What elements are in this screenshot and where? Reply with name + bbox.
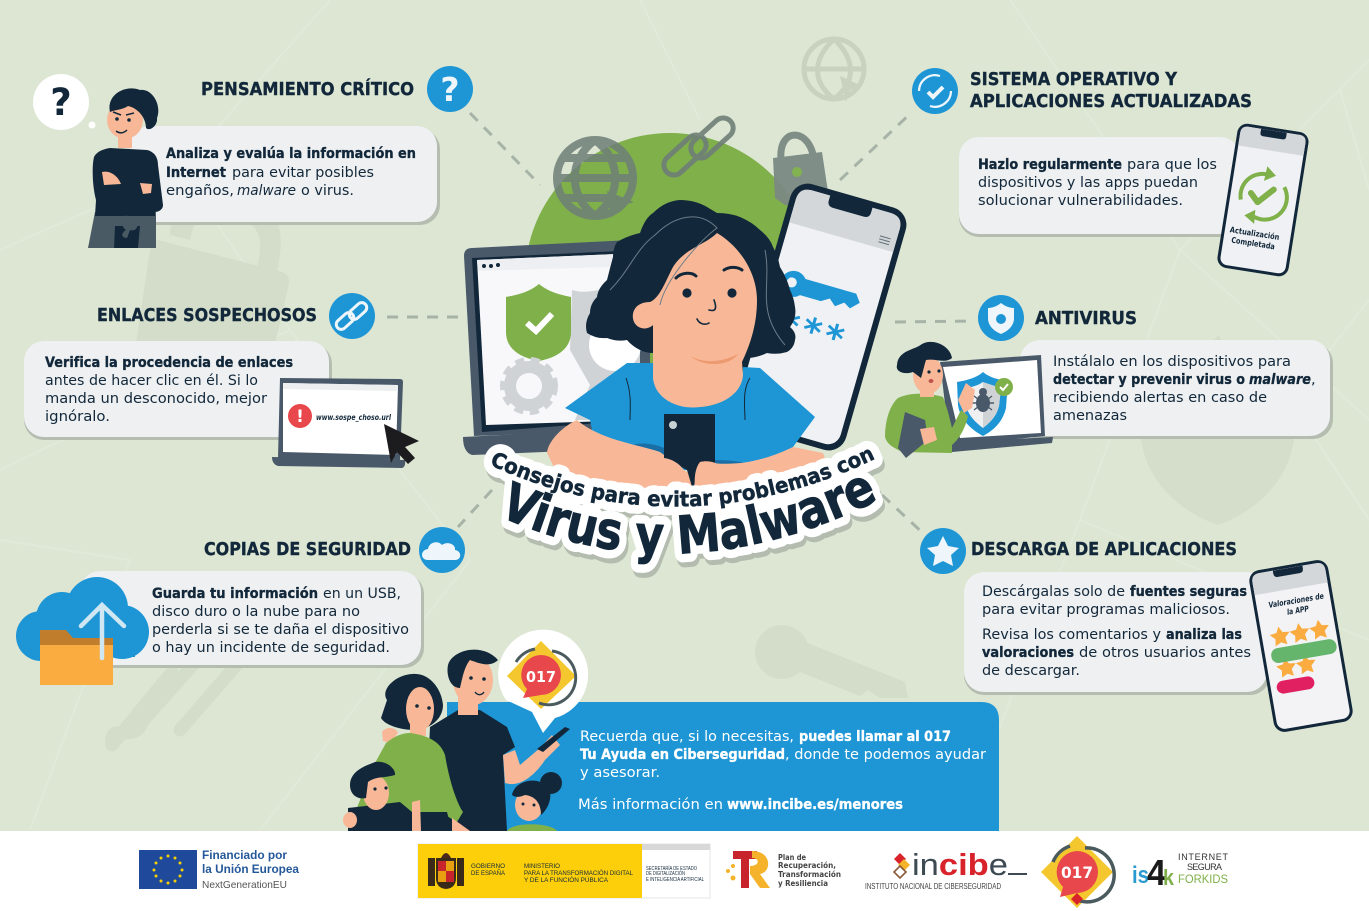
logo: IS4K: 4 bbox=[1147, 852, 1166, 893]
body text: solucionar vulnerabilidades. bbox=[978, 192, 1183, 209]
heading: COPIAS DE SEGURIDAD bbox=[204, 539, 411, 560]
body text: malware bbox=[237, 182, 296, 199]
logo text: Unión Europea: NextGenerationEU bbox=[202, 879, 287, 891]
body text: Recuerda que, si lo necesitas, bbox=[580, 728, 794, 745]
panel: copias de seguridad bbox=[16, 527, 465, 685]
body text: Más información en bbox=[578, 796, 723, 813]
phone: app ratings: Valoraciones de bbox=[1268, 591, 1325, 610]
body text: en un USB, bbox=[323, 585, 401, 602]
body text: analiza las bbox=[1166, 626, 1242, 643]
logo: IS4K: SEGURA bbox=[1187, 862, 1222, 872]
watermark: shield bbox=[1140, 335, 1295, 525]
body text: fuentes seguras bbox=[1130, 583, 1247, 600]
footer bbox=[0, 831, 1369, 911]
heading bbox=[970, 69, 1252, 112]
logo: 017: 017 bbox=[1061, 863, 1093, 882]
title text: Virus y Malware bbox=[508, 478, 876, 564]
logo: Plan de Recuperación: Transformación bbox=[778, 869, 841, 879]
blue panel bbox=[447, 702, 999, 831]
logo: IS4K: is bbox=[1132, 862, 1149, 889]
logo: Plan de Recuperación: Plan de bbox=[778, 852, 806, 862]
body text: de otros usuarios antes bbox=[1079, 644, 1251, 661]
body text: o virus. bbox=[301, 182, 354, 199]
logo: Plan de Recuperación: y Resiliencia bbox=[778, 878, 828, 888]
body text: , bbox=[1311, 371, 1316, 388]
logo: Gobierno de España: MINISTERIO bbox=[524, 863, 560, 870]
phone: app ratings bbox=[1248, 558, 1354, 734]
logo: IS4K: k bbox=[1163, 865, 1175, 890]
icon: question mark: ? bbox=[440, 70, 460, 109]
smartphone bbox=[726, 179, 911, 455]
icon: green shield with check bbox=[506, 284, 571, 361]
green circle bbox=[525, 133, 815, 423]
card bbox=[24, 341, 332, 440]
logo: 017 bbox=[1041, 836, 1114, 908]
logo: Plan de Recuperación bbox=[726, 851, 841, 888]
body text: Tu Ayuda en Ciberseguridad bbox=[580, 746, 785, 763]
icon: shield bbox=[978, 295, 1024, 341]
logo: Gobierno de España: SECRETARÍA DE ESTADO bbox=[646, 865, 697, 872]
title band: Consejos para evitar problemas con bbox=[484, 440, 883, 516]
body text: dispositivos y las apps puedan bbox=[978, 174, 1198, 191]
title text: Consejos para evitar problemas con bbox=[492, 450, 874, 509]
body text: para evitar posibles bbox=[232, 164, 374, 181]
held phone bbox=[664, 414, 715, 490]
laptop bbox=[463, 239, 650, 455]
icon: cloud bbox=[419, 527, 465, 573]
logo text: Unión Europea: Financiado por bbox=[202, 850, 288, 862]
boy with laptop bbox=[885, 342, 1053, 458]
logo: Gobierno de España: Y DE LA FUNCIÓN PÚBLICA bbox=[524, 877, 609, 884]
logo: IS4K bbox=[1132, 852, 1228, 893]
panel: llamar al 017 bbox=[343, 630, 999, 831]
body text bbox=[982, 583, 1251, 679]
body text: detectar y prevenir virus o bbox=[1053, 371, 1245, 388]
body text: Internet bbox=[166, 164, 226, 181]
watermark: paper clip bbox=[112, 640, 258, 745]
arms and hands bbox=[547, 420, 695, 500]
body text: recibiendo alertas en caso de bbox=[1053, 389, 1267, 406]
phone: update complete: Actualización bbox=[1229, 224, 1280, 242]
title band: Virus y Malware bbox=[501, 472, 883, 573]
watermark: padlock bbox=[132, 195, 289, 400]
body text: disco duro o la nube para no bbox=[152, 603, 360, 620]
icon: chain link bbox=[329, 293, 375, 339]
logo: Gobierno de España: PARA LA TRANSFORMACIÓN DIGITAL bbox=[524, 870, 634, 877]
body text bbox=[1053, 353, 1316, 424]
body text: , donde te podemos ayudar bbox=[785, 746, 986, 763]
body text: engaños, bbox=[166, 182, 234, 199]
heading: PENSAMIENTO CRÍTICO bbox=[201, 78, 414, 100]
body text: amenazas bbox=[1053, 407, 1127, 424]
heading: DESCARGA DE APLICACIONES bbox=[971, 539, 1237, 560]
logo text: Unión Europea bbox=[202, 850, 300, 891]
panel: antivirus bbox=[885, 295, 1333, 458]
heading: SISTEMA OPERATIVO Y bbox=[970, 69, 1178, 90]
body text: para que los bbox=[1127, 156, 1217, 173]
icon: star bbox=[920, 528, 966, 574]
body text bbox=[978, 156, 1217, 209]
speech bubble with 017 logo: 017 bbox=[526, 668, 556, 686]
man with arms crossed bbox=[88, 88, 163, 248]
logo: Plan de Recuperación: Recuperación, bbox=[778, 860, 836, 870]
phone: update complete: Completada bbox=[1231, 236, 1276, 251]
panel: sistema operativo bbox=[912, 68, 1310, 278]
body text: Revisa los comentarios y bbox=[982, 626, 1161, 643]
heading: APLICACIONES ACTUALIZADAS bbox=[970, 91, 1252, 112]
body text bbox=[166, 145, 416, 199]
card bbox=[1020, 340, 1333, 439]
body text: Analiza y evalúa la información en bbox=[166, 145, 416, 162]
logo: IS4K: INTERNET bbox=[1178, 852, 1228, 862]
body text: manda un desconocido, mejor bbox=[45, 390, 267, 407]
title band shadow: Virus y Malware bbox=[504, 490, 885, 578]
logo: INCIBE: INSTITUTO NACIONAL DE CIBERSEGURIDAD bbox=[865, 882, 1001, 891]
laptop with suspicious url: ! bbox=[296, 407, 304, 427]
body text: puedes llamar al 017 bbox=[799, 728, 951, 745]
heading: ENLACES SOSPECHOSOS bbox=[97, 305, 317, 326]
icon: globe bbox=[557, 140, 634, 218]
connector lines bbox=[387, 112, 972, 535]
icon: gear bbox=[503, 360, 555, 412]
body text bbox=[578, 728, 986, 813]
logo text: Unión Europea: la Unión Europea bbox=[202, 864, 300, 876]
icon: update check bbox=[912, 68, 958, 114]
logo: IS4K: FORKIDS bbox=[1178, 874, 1228, 886]
icon: padlock bbox=[773, 135, 830, 205]
logo: EU flag bbox=[139, 850, 197, 889]
card bbox=[130, 126, 440, 225]
boy bbox=[348, 802, 412, 831]
logo: Gobierno de España: E INTELIGENCIA ARTIFICIAL bbox=[646, 877, 704, 883]
body text: perderla si se te daña el dispositivo bbox=[152, 621, 409, 638]
father bbox=[425, 710, 515, 831]
speech bubble with 017 logo bbox=[498, 630, 588, 733]
heading: ANTIVIRUS bbox=[1035, 308, 1137, 329]
shirt bbox=[565, 363, 815, 470]
body text: o hay un incidente de seguridad. bbox=[152, 639, 390, 656]
body text: valoraciones bbox=[982, 644, 1074, 661]
body text: malware bbox=[1249, 371, 1311, 388]
card bbox=[959, 137, 1243, 237]
panel: pensamiento crítico bbox=[33, 66, 473, 248]
logo: Gobierno de España: DE DIGITALIZACIÓN bbox=[646, 870, 685, 877]
watermark: globe bbox=[804, 39, 864, 102]
thought bubble bbox=[33, 74, 96, 130]
central illustration bbox=[463, 114, 911, 500]
logo: INCIBE: incibe bbox=[912, 847, 1008, 882]
body text: Guarda tu información bbox=[152, 585, 318, 602]
body text: de descargar. bbox=[982, 662, 1080, 679]
body text: Instálalo en los dispositivos para bbox=[1053, 353, 1291, 370]
face bbox=[633, 233, 757, 408]
family illustration bbox=[343, 650, 570, 831]
icon: chain link bbox=[660, 114, 737, 179]
girl bbox=[540, 772, 562, 794]
body text bbox=[45, 354, 293, 425]
illustration: cloud upload folder bbox=[16, 577, 149, 685]
title bbox=[484, 440, 885, 578]
title band shadow: Consejos para evitar problemas con bbox=[486, 458, 885, 520]
laptop with suspicious url: www.sospe_choso.url bbox=[316, 413, 391, 422]
body text: Verifica la procedencia de enlaces bbox=[45, 354, 293, 371]
body text: Descárgalas solo de bbox=[982, 583, 1125, 600]
mother bbox=[381, 674, 443, 730]
woman bbox=[547, 200, 827, 500]
logo: Gobierno de España: GOBIERNO bbox=[471, 863, 505, 870]
phone: update complete bbox=[1216, 122, 1310, 278]
logo: Gobierno de España: DE ESPAÑA bbox=[471, 868, 506, 877]
body text: www.incibe.es/menores bbox=[727, 796, 903, 813]
body text: ignóralo. bbox=[45, 408, 110, 425]
body text: Hazlo regularmente bbox=[978, 156, 1122, 173]
card bbox=[80, 571, 424, 668]
body text: y asesorar. bbox=[580, 764, 660, 781]
body text: antes de hacer clic en él. Si lo bbox=[45, 372, 258, 389]
watermark: key bbox=[755, 625, 908, 698]
body text bbox=[152, 585, 409, 656]
panel: enlaces sospechosos bbox=[24, 293, 419, 468]
thought bubble: ? bbox=[50, 81, 72, 124]
card bbox=[964, 572, 1270, 695]
icon: question mark bbox=[427, 66, 473, 112]
password asterisks: *** bbox=[774, 304, 848, 361]
icon: blue key bbox=[777, 268, 863, 315]
panel: descarga de aplicaciones bbox=[920, 528, 1354, 734]
shield grey back bbox=[570, 285, 640, 420]
logo: INCIBE bbox=[865, 847, 1027, 891]
laptop with suspicious url bbox=[272, 378, 419, 468]
body text: para evitar programas maliciosos. bbox=[982, 601, 1230, 618]
phone: app ratings: la APP bbox=[1286, 604, 1310, 617]
logo: Gobierno de España bbox=[418, 844, 710, 898]
